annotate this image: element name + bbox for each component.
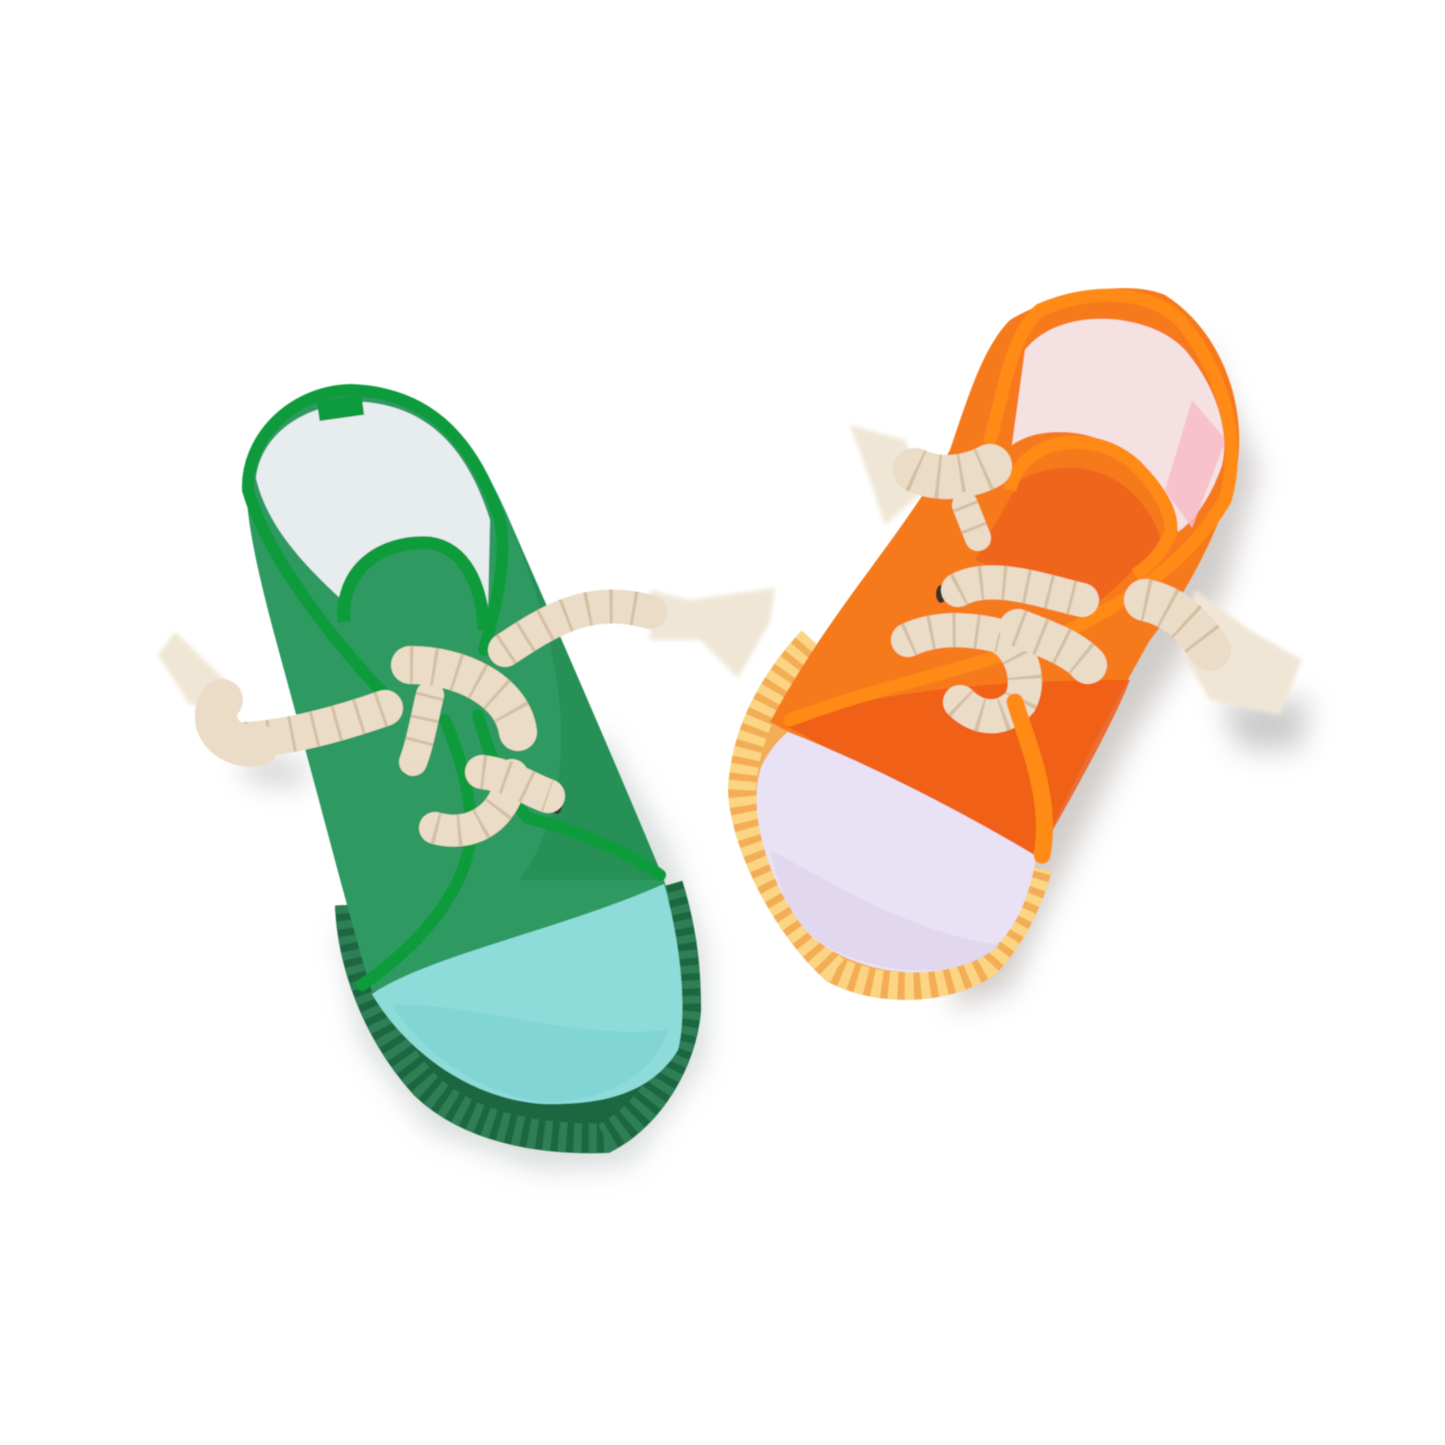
orange rope right xyxy=(1145,600,1210,650)
green lower trims xyxy=(362,720,471,985)
green rope lace left xyxy=(216,700,385,746)
orange sole xyxy=(742,640,1038,986)
green tongue trim xyxy=(344,543,484,630)
green insole xyxy=(256,402,490,610)
green shoe xyxy=(158,386,775,1138)
green canvas upper xyxy=(246,386,670,992)
green rope knot centre xyxy=(410,665,518,762)
green sole xyxy=(350,885,686,1138)
orange rope knot upper xyxy=(958,582,1082,600)
orange insole xyxy=(1012,319,1224,532)
lilac toe cap xyxy=(757,732,1036,972)
eyelet xyxy=(936,585,946,603)
orange canvas upper xyxy=(770,288,1239,862)
orange rope knot middle xyxy=(908,628,1088,665)
orange rope frayed ends xyxy=(850,425,1302,715)
blue toe cap xyxy=(372,884,682,1104)
green rope knot lower xyxy=(435,772,548,831)
orange lower trim xyxy=(1015,702,1045,855)
green rope frayed ends xyxy=(158,588,775,705)
darker canvas shading xyxy=(510,525,664,880)
orange shoe xyxy=(742,288,1302,986)
orange tongue trim xyxy=(1010,442,1171,575)
orange rope knot lower xyxy=(960,640,1025,716)
green collar trim xyxy=(248,390,502,705)
orange rope top left xyxy=(915,466,990,538)
green heel tab xyxy=(317,395,364,421)
shoe shadows xyxy=(240,340,1310,1170)
green rope lace right xyxy=(505,606,650,650)
orange canvas shadow xyxy=(785,680,1130,862)
orange collar trim xyxy=(790,295,1231,720)
eyelets xyxy=(402,757,412,775)
